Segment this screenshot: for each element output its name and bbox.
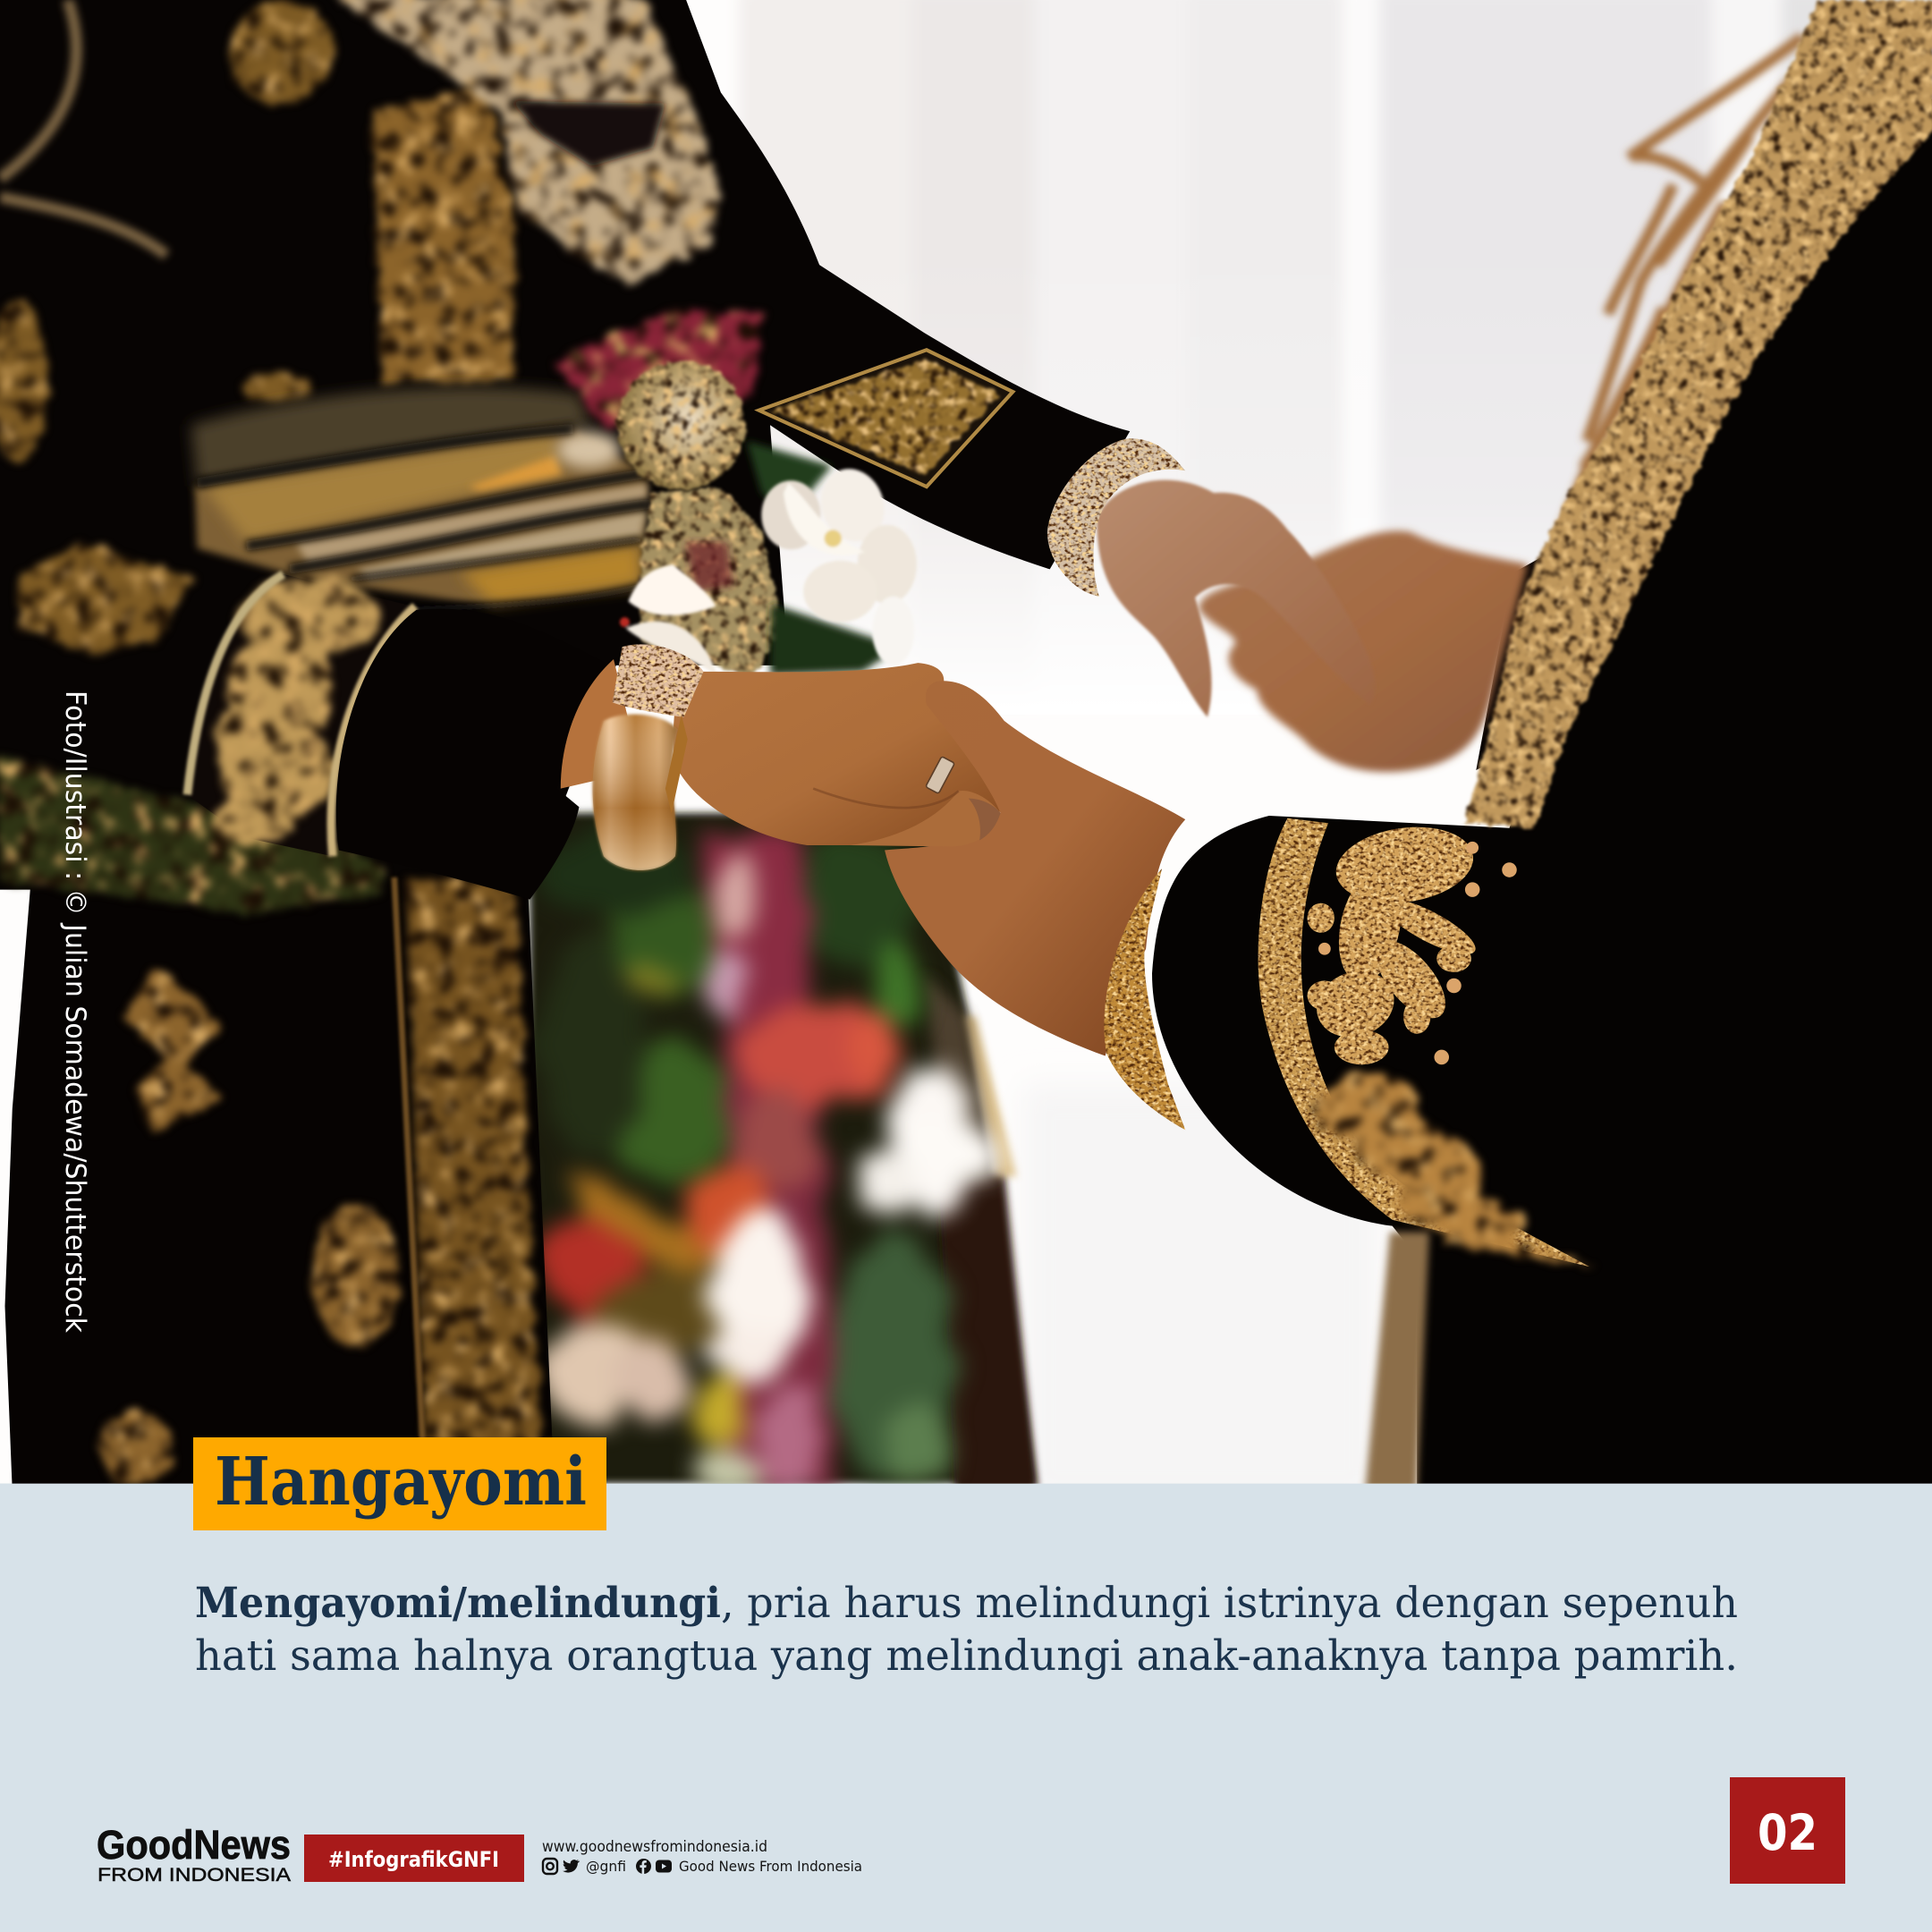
gold collar trim — [1464, 0, 1932, 828]
dark green leaves — [747, 441, 832, 518]
groom figure: black jacket — [1152, 0, 1932, 1491]
bride lower hand and bangles — [561, 644, 1001, 870]
social page name: Good News From Indonesia — [679, 1858, 862, 1875]
photo credit: Foto/Ilustrasi : © Julian Somadewa/Shutterstock — [59, 691, 91, 1333]
green leaf garland at waist — [0, 754, 382, 914]
icon: facebook — [636, 1859, 651, 1874]
pale gold edge strip — [963, 1016, 1016, 1177]
groom upper hand — [1199, 531, 1528, 772]
groom sleeve embroidery — [1104, 818, 1596, 1267]
bride figure: black velvet outfit — [0, 0, 1185, 1491]
brown drape edge — [939, 1171, 1038, 1491]
logo: GoodNews From Indonesia — [97, 1822, 291, 1885]
feather motif upper — [1308, 818, 1482, 1064]
upper sleeve embroidered cuff — [759, 350, 1013, 487]
groom lower hand — [813, 681, 1185, 1056]
shoulder trim — [0, 0, 166, 255]
collar dark mark — [512, 101, 665, 166]
sequin collar — [333, 0, 721, 284]
heading: Hangayomi: Hangayomi — [215, 1444, 587, 1521]
gold cuff border — [1258, 818, 1589, 1267]
sash main body — [195, 425, 647, 606]
gold vertical band on skirt — [407, 877, 542, 1491]
logo: GoodNews From Indonesia: GoodNews — [97, 1822, 291, 1868]
bride upper hand — [1097, 480, 1375, 717]
curtain background — [0, 0, 1932, 1504]
icon: instagram — [543, 1859, 557, 1874]
social handle: @gnfi — [586, 1858, 626, 1875]
bride lower cuff and sleeve — [187, 574, 610, 900]
rhinestone dots — [1318, 842, 1517, 1064]
bangle pearl band — [613, 644, 704, 717]
lower gold sheen — [460, 545, 640, 604]
feather motif lower — [1316, 1072, 1596, 1267]
page number badge: 02 — [1758, 1804, 1818, 1861]
groom inner dark strip by wrist — [1476, 555, 1546, 770]
photo: wedding couple holding hands — [0, 0, 1932, 1504]
website url: www.goodnewsfromindonesia.id — [542, 1838, 767, 1855]
body text — [195, 1579, 1738, 1681]
collar fringe tassels — [1559, 37, 1802, 542]
striped sash — [191, 387, 649, 610]
skirt — [5, 875, 555, 1491]
skirt gold motifs — [98, 967, 399, 1486]
bride fingertip resting on groom hand — [851, 791, 1001, 846]
hashtag badge — [304, 1835, 524, 1882]
dark background behind garland — [530, 813, 1035, 1484]
logo: GoodNews From Indonesia: FROM INDONESIA — [97, 1865, 291, 1885]
groom jacket lower edge strip — [1365, 1233, 1429, 1491]
brooch and red cloth — [555, 308, 784, 678]
silver bracelet on upper wrist — [1047, 438, 1185, 597]
blurred flower garland — [530, 813, 1038, 1496]
gold motifs on bodice — [0, 0, 333, 653]
body text: Mengayomi/melindungi — [195, 1579, 721, 1628]
wedding ring — [926, 757, 954, 793]
upper hands — [1097, 480, 1528, 772]
hashtag badge: #InfografikGNFI — [328, 1847, 499, 1872]
body text: hati sama halnya orangtua yang melindungi anak-anaknya tanpa pamrih. — [195, 1631, 1738, 1681]
icon: twitter — [563, 1860, 580, 1873]
jewelled bracelet — [1104, 869, 1185, 1130]
page number badge — [1730, 1777, 1845, 1884]
gold bangle — [593, 715, 678, 870]
chest gold band — [372, 86, 515, 382]
icon: youtube — [656, 1860, 672, 1873]
frangipani flowers — [620, 441, 917, 675]
body text: , pria harus melindungi istrinya dengan sepenuh — [721, 1579, 1738, 1628]
sash dim upper band — [191, 387, 591, 487]
